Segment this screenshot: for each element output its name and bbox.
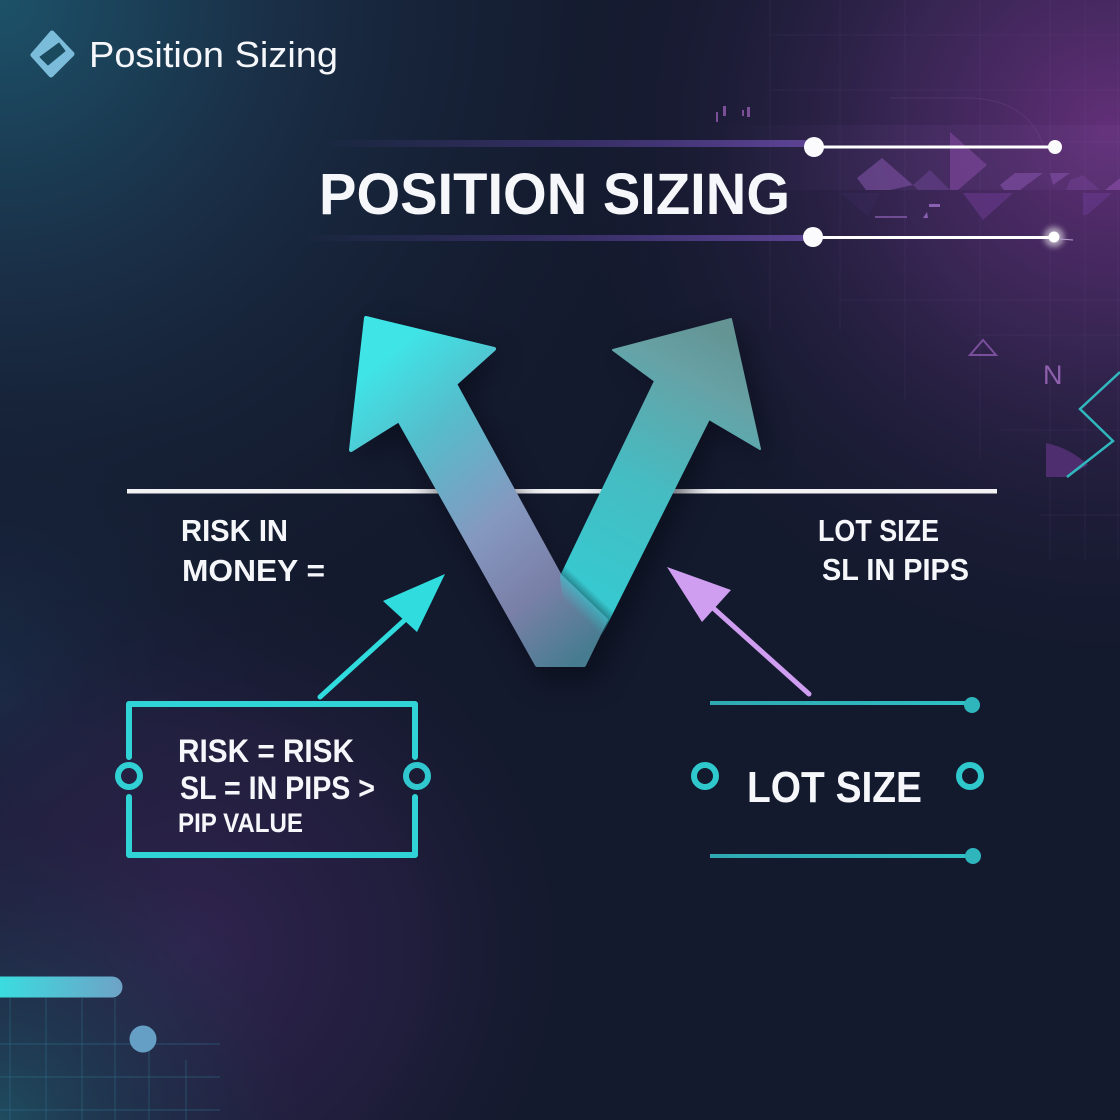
box right connector [406, 765, 428, 787]
equation right [818, 513, 969, 587]
bottom accent dot [130, 1026, 156, 1052]
box frame [129, 704, 415, 855]
box left connector [118, 765, 140, 787]
title connector: top [804, 137, 1062, 157]
logo wordmark: Position Sizing [89, 34, 338, 75]
bottom accent bar [0, 976, 122, 998]
V shaped double arrow [351, 318, 760, 665]
lot size left ring [694, 765, 716, 787]
decorative teal zigzag [1067, 372, 1120, 477]
lot size panel [694, 697, 981, 864]
decorative triangle [970, 340, 996, 355]
equation left: MONEY = [182, 553, 325, 588]
left arrow arm [351, 318, 606, 665]
formula box [118, 704, 428, 855]
equation right: LOT SIZE [818, 513, 939, 548]
equation right: SL IN PIPS [822, 552, 969, 587]
formula text [178, 733, 375, 838]
horizontal divider [127, 489, 997, 494]
logo icon [33, 33, 72, 75]
lot size label: LOT SIZE [747, 763, 922, 812]
grid: bottom left [0, 998, 220, 1120]
purple pointer arrow [667, 567, 809, 694]
decorative letter: N [1043, 360, 1062, 390]
teal pointer arrow [320, 574, 445, 697]
decorative purple shape [1046, 443, 1088, 477]
equation left: RISK IN [181, 513, 288, 548]
lot size right ring [959, 765, 981, 787]
V arrow shadow [360, 328, 768, 682]
formula text: SL = IN PIPS > [180, 770, 375, 806]
title connector: bottom [803, 227, 1073, 247]
decorative purple chart shapes [700, 106, 1120, 220]
title band: bottom [300, 235, 810, 241]
title: POSITION SIZING [319, 162, 790, 227]
title band: top [320, 140, 810, 147]
equation left [181, 513, 325, 588]
formula text: PIP VALUE [178, 808, 303, 838]
right arrow arm [561, 319, 760, 665]
formula text: RISK = RISK [178, 733, 354, 769]
lot size bottom rule [710, 848, 981, 864]
grid: top right [770, 0, 1120, 560]
lot size top rule [710, 697, 980, 713]
